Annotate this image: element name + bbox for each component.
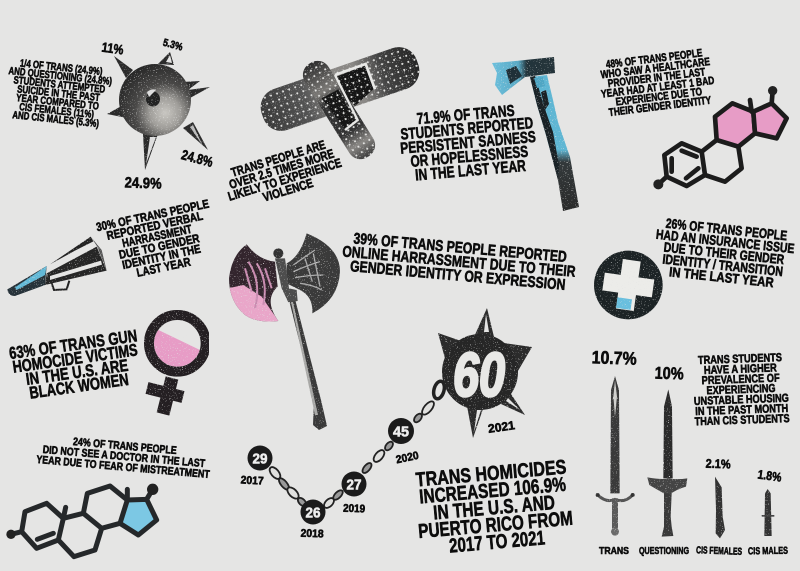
text: verbal harassment: REPORTED VERBAL [105,209,204,243]
text: verbal harassment: LAST YEAR [135,255,192,280]
sword: trans [596,376,635,536]
node: 2019: 27 [346,478,362,494]
panel: suicide attempts text: CIS FEMALES (11%) [19,101,95,121]
text: online harassment [340,229,577,295]
icon: estrogen molecule [653,86,787,189]
text: healthcare: YEAR HAD AT LEAST 1 BAD [600,75,715,101]
chart: housing swords [591,347,788,558]
icon: spiked ball chart [107,52,210,170]
panel: suicide attempts text: SUICIDE IN THE PAST [17,83,101,104]
text: violence: OVER 2.5 TIMES MORE [227,147,336,192]
chart: homicides chain timeline [240,308,532,540]
text: insurance [652,215,796,292]
node: 2019 [342,472,366,496]
icon: megaphone [7,237,107,296]
node: 2017 [248,446,272,470]
label: 5.3%: 5.3% [162,37,185,54]
icon: female symbol [147,315,206,414]
chain links [268,380,446,510]
text: gun homicide: 63% OF TRANS GUN [8,326,138,363]
axis label: questioning: QUESTIONING [639,546,689,557]
node: 2021 spiked mace: 60 [453,341,505,410]
text: unstable housing [692,352,790,428]
text: online harassment: 39% OF TRANS PEOPLE REPORTED [353,230,567,266]
text: insurance: IN THE LAST YEAR [668,264,775,290]
value: questioning: 10% [654,364,684,384]
text: homicides increased: TRANS HOMICIDES [415,456,567,491]
text: healthcare: THEIR GENDER IDENTITY [608,95,712,119]
panel: suicide attempts text [3,56,113,131]
text: gun homicide: IN THE U.S. ARE [25,356,129,389]
text: doctor avoidance: 24% OF TRANS PEOPLE [73,436,177,457]
text: unstable housing: TRANS STUDENTS [698,352,782,367]
axis label: cis females: CIS FEMALES [696,545,742,558]
text: healthcare: WHO SAW A HEALTHCARE [600,56,711,81]
knife: cis males [762,489,774,536]
text: sadness [397,101,539,186]
text: homicides increased: 2017 TO 2021 [448,527,546,558]
text: violence: VIOLENCE [261,176,315,205]
text: verbal harassment: HARRASSMENT [121,222,194,250]
text: violence: LIKELY TO EXPERIENCE [226,156,343,204]
text: verbal harassment: IDENTITY IN THE [121,242,202,272]
year: 2018: 2018 [300,528,324,540]
text: doctor avoidance: DID NOT SEE A DOCTOR IN THE LAST [42,444,206,470]
label: 24.9%: 24.9% [124,174,162,193]
panel: suicide attempts text: 1/4 OF TRANS (24.9%) [19,57,103,78]
panel: suicide attempts text: STUDENTS ATTEMPTED [13,74,106,96]
text: sadness: PERSISTENT SADNESS [400,129,537,158]
node: 2021 spiked mace [438,308,532,438]
panel: suicide attempts text: AND QUESTIONING (24.8%) [8,65,113,88]
year: 2020: 2020 [395,450,420,466]
icon: blue hatchet [492,57,579,211]
text: gun homicide: BLACK WOMEN [28,370,130,403]
year: 2021: 2021 [487,418,516,436]
text: homicides increased [413,456,575,560]
label: 24.8%: 24.8% [180,146,215,170]
text: homicides increased: PUERTO RICO FROM [417,508,574,543]
text: healthcare: PROVIDER IN THE LAST [607,66,706,90]
text: sadness: STUDENTS REPORTED [400,115,534,144]
sword: questioning [647,389,687,537]
text: verbal harassment: DUE TO GENDER [118,231,201,262]
text: healthcare: 48% OF TRANS PEOPLE [605,47,703,71]
text: verbal harassment [95,197,221,286]
knife: cis females [715,477,725,538]
text: sadness: IN THE LAST YEAR [415,158,527,184]
icon: testosterone molecule [6,484,158,557]
text: gun homicide [8,326,144,405]
icon: bandage [255,42,425,164]
text: healthcare: EXPERIENCE DUE TO [615,86,703,109]
icon: medical cross [594,251,663,319]
year: 2019: 2019 [343,503,365,515]
axis label: trans: TRANS [599,545,629,557]
label: 11%: 11% [101,40,125,58]
node: 2018 [300,500,326,524]
icon: battle axe [228,233,340,430]
text: online harassment: GENDER IDENTITY OR EXPRESSION [349,258,566,294]
node: 2017: 29 [252,452,268,468]
text: doctor avoidance [36,433,212,481]
value: trans: 10.7% [591,347,637,369]
text: violence [220,135,346,214]
year: 2017: 2017 [240,474,264,488]
node: 2018: 26 [306,506,320,522]
text: unstable housing: HAVE A HIGHER [704,362,778,377]
text: sadness: OR HOPELESSNESS [410,144,529,171]
node: 2020 [388,418,414,444]
text: unstable housing: PREVALENCE OF [701,373,780,387]
text: homicides increased: INCREASED 106.9% [418,474,567,508]
panel: suicide attempts text: YEAR COMPARED TO [16,92,99,113]
text: homicides increased: IN THE U.S. AND [432,492,556,524]
value: cis males: 1.8% [757,467,782,485]
text: healthcare [597,46,717,120]
text: verbal harassment: 30% OF TRANS PEOPLE [95,197,210,234]
node: 2020: 45 [393,424,409,440]
text: sadness: 71.9% OF TRANS [416,103,515,128]
text: doctor avoidance: YEAR DUE TO FEAR OF MISTREATMENT [36,454,210,481]
text: online harassment: ONLINE HARRASSMENT DUE TO THEIR [342,243,576,281]
panel: suicide attempts text: AND CIS MALES (5.3%) [12,109,100,130]
text: unstable housing: EXPERIENCING [706,383,776,397]
text: gun homicide: HOMOCIDE VICTIMS [11,340,139,377]
value: cis females: 2.1% [705,457,731,471]
text: violence: TRANS PEOPLE ARE [229,138,327,180]
